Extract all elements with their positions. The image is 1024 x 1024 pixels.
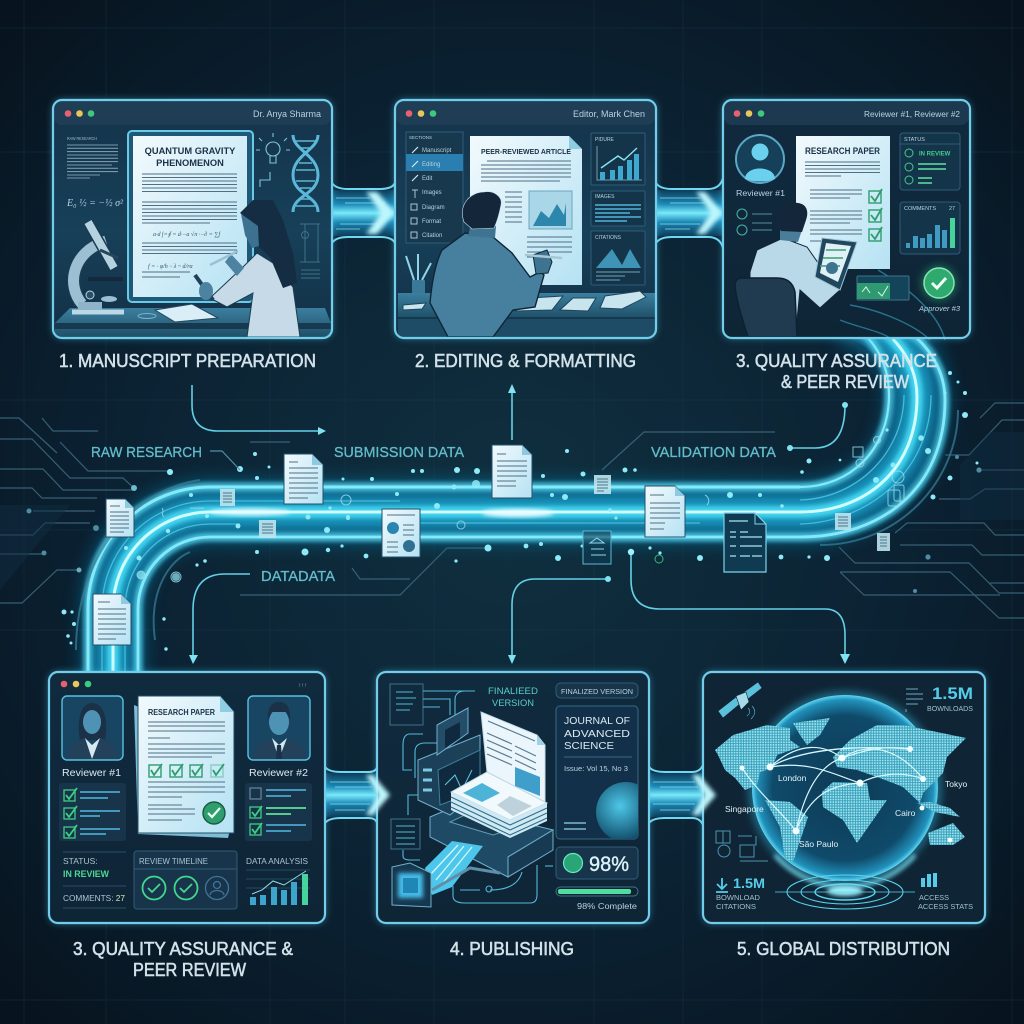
panel: quality assurance and peer review, top (723, 100, 970, 340)
journal cover (556, 706, 638, 840)
sidebar menu: SECTIONS (409, 135, 432, 140)
status block: IN REVIEW (63, 869, 109, 879)
reviewer small icons (737, 209, 772, 235)
stream passing panel (840, 270, 945, 340)
connector: DataData to review panel (189, 574, 250, 664)
article paper: PEER-REVIEWED ARTICLE (481, 147, 571, 156)
small outlined document (583, 531, 611, 564)
window controls: ↑↑↑ (298, 683, 307, 689)
connector: arrow up to editing (508, 384, 516, 440)
data analysis (246, 857, 310, 905)
paper (128, 131, 253, 302)
microscope (72, 222, 156, 318)
citations metric: 1.5M (733, 875, 765, 891)
approver label: Approver #3 (918, 304, 961, 313)
window controls (61, 681, 307, 689)
heading: publishing: 4. PUBLISHING (450, 939, 574, 959)
progress bar: 98% Complete (577, 902, 638, 911)
reviewer at desk (750, 203, 857, 320)
documents on stream (93, 445, 890, 645)
document 1 (106, 499, 134, 537)
city labels: Cairo (895, 808, 916, 818)
sidebar menu: Manuscript (422, 148, 452, 154)
status box: STATUS (904, 137, 925, 143)
data particles (62, 371, 978, 651)
citations box (591, 231, 645, 285)
access stats: ACCESS (919, 895, 949, 902)
connector tube: panel 5 to 6 (649, 765, 703, 825)
review timeline (134, 851, 237, 909)
citations metric (716, 875, 765, 911)
connector: validation line (787, 402, 848, 451)
heading: quality assurance top: 3. QUALITY ASSURANCE (736, 351, 937, 371)
publishing machine (418, 708, 553, 877)
journal cover: SCIENCE (564, 740, 614, 752)
comments box: COMMENTS (904, 206, 936, 212)
circuit traces: left (0, 418, 173, 603)
sidebar menu: Format (422, 219, 441, 225)
editor name: Editor, Mark Chen (573, 109, 645, 120)
notes on desk (155, 304, 218, 322)
flow label: raw research: RAW RESEARCH (91, 445, 202, 461)
panel outlines (49, 100, 985, 923)
papers on desk (403, 291, 646, 311)
panel: editing and formatting (395, 100, 656, 338)
reviewer 1 checklist (59, 783, 126, 841)
research paper (796, 136, 890, 269)
status box: IN REVIEW (919, 152, 951, 158)
connector: manuscript to submission arrow (192, 385, 326, 435)
reviewer 1 name: Reviewer #1 (62, 768, 121, 779)
document 3 (284, 454, 323, 504)
reviewer name: Reviewer #1 (736, 188, 785, 198)
research paper stack (134, 696, 234, 838)
circuit traces: right (839, 403, 1024, 618)
paper: a·d ∫=∮ = d·−a √π ·−∂ = ∑f (153, 231, 222, 238)
reviewer 2 portrait (248, 696, 310, 760)
sidebar menu: Images (422, 190, 442, 196)
reviewer 2 checklist (245, 783, 312, 841)
flow label: submission data: SUBMISSION DATA (334, 445, 464, 461)
window controls (65, 110, 94, 117)
journal cover: JOURNAL OF (564, 715, 630, 727)
connection arcs (742, 747, 923, 831)
heading: quality assurance bottom (73, 939, 293, 980)
document 6 (645, 486, 685, 537)
city labels: São Paulo (799, 839, 838, 849)
sidebar menu: Diagram (422, 205, 445, 211)
finalized chip (556, 683, 638, 698)
article paper (470, 136, 582, 285)
connector: to publishing (508, 576, 611, 664)
small process icons (716, 831, 768, 861)
heading: global distribution: 5. GLOBAL DISTRIBUTION (737, 939, 950, 959)
status buttons (857, 276, 909, 300)
small documents (220, 475, 890, 551)
light bulb (256, 133, 290, 187)
downloads metric (906, 684, 973, 713)
window controls (406, 110, 436, 117)
heading: editing and formatting: 2. EDITING & FORMATTING (415, 351, 636, 371)
citations box: CITATIONS (595, 235, 622, 241)
city nodes (740, 746, 952, 842)
world map continents (715, 718, 966, 862)
finalized version heading: FINALIEED (488, 686, 538, 697)
DNA helix (293, 135, 318, 212)
city labels: Tokyo (945, 779, 967, 789)
reviewer 2 name: Reviewer #2 (249, 768, 308, 779)
status block (63, 852, 126, 908)
desk (55, 308, 331, 337)
reviewer avatar (736, 135, 784, 183)
connector tube: panel 1 to 2 (332, 183, 395, 243)
research paper: RESEARCH PAPER (805, 146, 880, 156)
data stream band (76, 305, 958, 690)
desk (398, 293, 655, 337)
document 2 (93, 594, 131, 645)
panel: quality assurance and peer review, bottom (49, 672, 325, 923)
journal cover: ADVANCED (564, 728, 630, 740)
raw research notes (67, 136, 118, 178)
panel: publishing (377, 672, 656, 923)
status block: STATUS: (63, 856, 98, 866)
images box (591, 191, 645, 226)
flow label: raw research (91, 445, 240, 470)
finalized version heading (488, 686, 538, 709)
access stats (918, 873, 973, 911)
research paper stack: RESEARCH PAPER (148, 708, 215, 717)
city labels (725, 773, 967, 849)
process diagram wires (390, 684, 553, 903)
sidebar menu: Edit (422, 176, 433, 182)
city labels: Singapore (725, 804, 764, 814)
author name: Dr. Anya Sharma (253, 109, 322, 120)
completion metric (556, 847, 638, 879)
tiny icon glyphs in the stream (137, 436, 904, 582)
downloads metric: 1.5M (932, 684, 973, 703)
woman writing (195, 200, 300, 337)
status box (900, 133, 960, 190)
completion metric: 98% (589, 853, 629, 876)
equation: E₀ ½ = −½ σ² (66, 198, 124, 209)
document 4 (492, 445, 532, 498)
images box: IMAGES (595, 194, 615, 200)
outlined document (724, 513, 766, 572)
heading: quality assurance bottom: PEER REVIEW (133, 960, 246, 980)
reviewer names: Reviewer #1, Reviewer #2 (864, 109, 960, 119)
approved badge (921, 265, 957, 301)
progress bar (556, 887, 638, 911)
flow label: datadata: DATADATA (261, 569, 335, 585)
window controls (734, 110, 764, 117)
pictures chart box (591, 133, 645, 185)
paper: f = · φ/h ·· λ ~ d/rα (148, 263, 194, 270)
downloads metric: BOWNLOADS (927, 706, 973, 713)
connector tube: panel 2 to 3 (656, 178, 723, 248)
reviewer 1 portrait (62, 696, 123, 760)
arrow: review to publishing (366, 775, 390, 815)
citations metric: BOWNLOAD (716, 895, 760, 902)
journal cover: Issue: Vol 15, No 3 (564, 766, 628, 773)
connector tube: panel 4 to 5 (325, 767, 378, 823)
chair (735, 278, 797, 337)
data analysis: DATA ANALYSIS (246, 857, 308, 866)
satellite icon (718, 682, 762, 719)
globe (748, 691, 942, 887)
document 5 with chart (382, 509, 420, 557)
sidebar menu: Citation (422, 233, 442, 239)
status block: COMMENTS: 27 (63, 893, 125, 903)
hologram rings (775, 875, 915, 909)
paper ribbon (425, 841, 500, 895)
sidebar menu (406, 132, 463, 243)
raw research notes: RAW RESEARCH (67, 136, 97, 141)
heading: quality assurance top (736, 351, 937, 392)
connector: to global distribution (628, 549, 850, 664)
city labels: London (778, 773, 807, 783)
instrument diagram (300, 224, 320, 278)
man editing (430, 192, 562, 337)
finalized version heading: VERSION (492, 698, 534, 709)
heading: quality assurance bottom: 3. QUALITY ASSURANCE & (73, 939, 293, 959)
arrow: publishing to distribution (692, 775, 716, 815)
comments box (900, 202, 960, 254)
access stats: ACCESS STATS (918, 904, 973, 911)
heading: quality assurance top: & PEER REVIEW (781, 372, 909, 392)
panel: global distribution (703, 672, 985, 923)
citations metric: CITATIONS (716, 904, 756, 911)
finalized chip: FINALIZED VERSION (561, 689, 633, 696)
heading: manuscript preparation: 1. MANUSCRIPT PREPARATION (59, 351, 316, 371)
paper: PHENOMENON (156, 158, 224, 168)
circuit traces: centre (240, 432, 775, 595)
review timeline: REVIEW TIMELINE (139, 857, 208, 866)
data chip (392, 863, 431, 907)
sidebar menu: Editing (422, 162, 440, 168)
flow label: validation data: VALIDATION DATA (651, 445, 776, 461)
panel: manuscript preparation (53, 100, 332, 338)
comments box: 27 (949, 206, 955, 212)
paper: QUANTUM GRAVITY (145, 146, 236, 156)
pen pot (406, 254, 431, 298)
pictures chart box: PIDURE (595, 137, 615, 143)
